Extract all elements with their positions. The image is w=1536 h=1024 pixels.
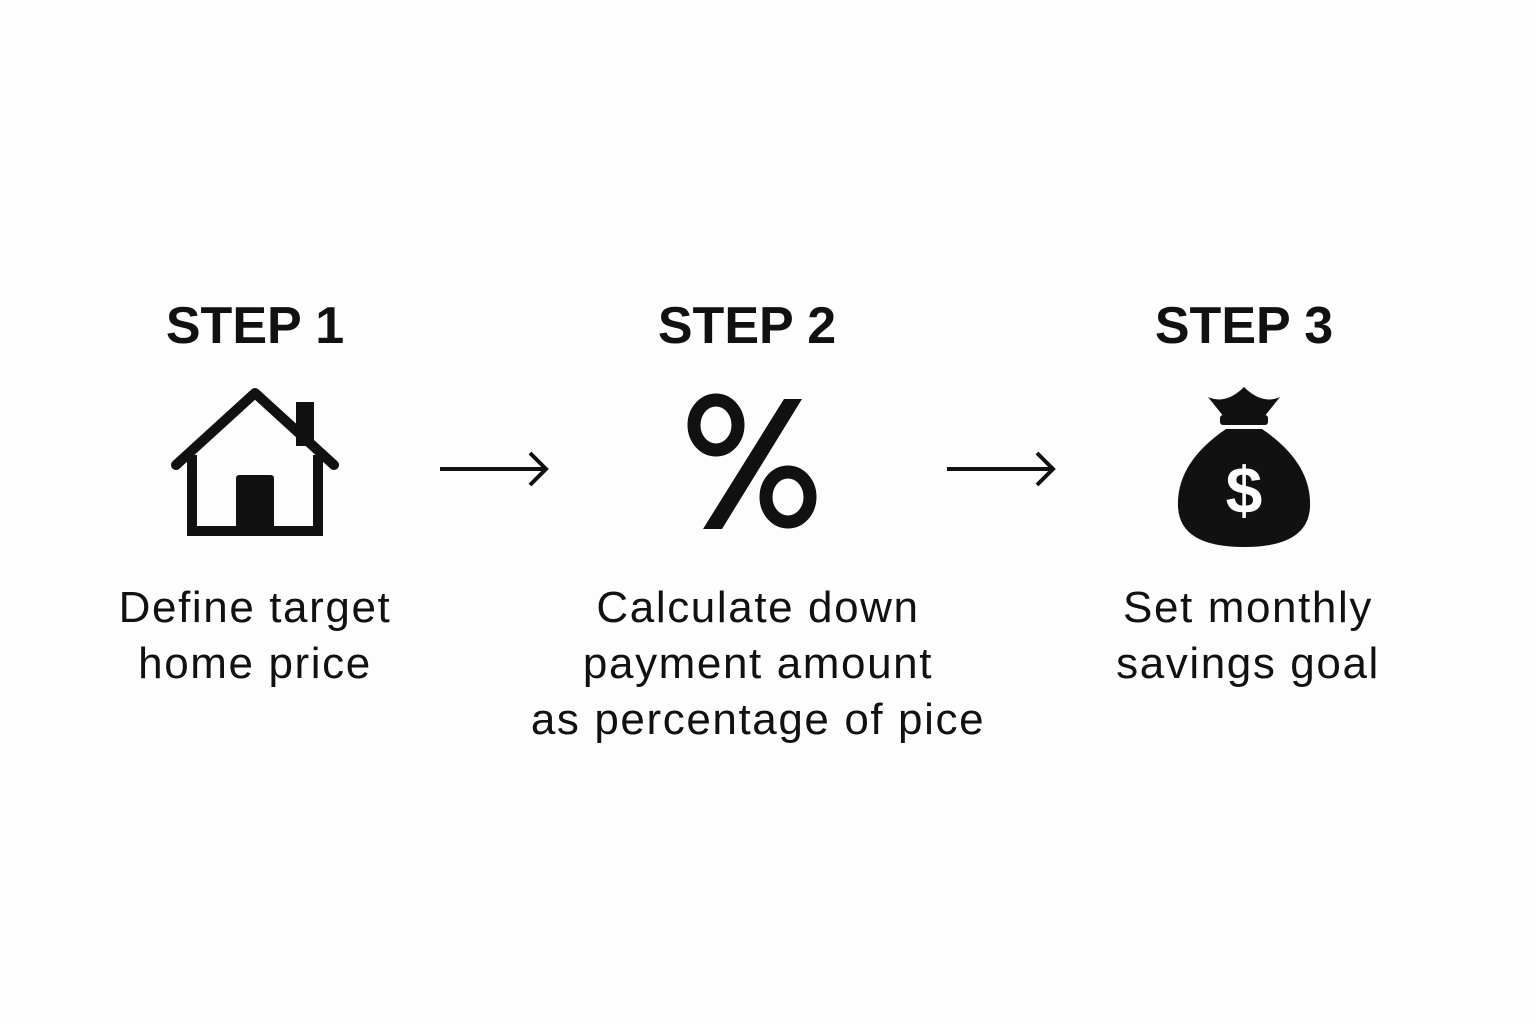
arrow 1: [440, 452, 549, 486]
icon: house: [171, 388, 339, 536]
text: step 3: Set monthly: [1123, 583, 1373, 632]
icon: percent: [688, 394, 816, 529]
icon: money bag: $: [1226, 453, 1262, 527]
text: step 1: home price: [138, 639, 372, 688]
text: step 2: [531, 583, 985, 744]
text: step 2: Calculate down: [596, 583, 920, 632]
text: step 3: [1116, 583, 1380, 688]
heading: step 3: STEP 3: [1155, 297, 1333, 355]
text: step 2: as percentage of pice: [531, 695, 985, 744]
icon: money bag: [1178, 387, 1310, 547]
text: step 1: [119, 583, 391, 688]
heading: step 2: STEP 2: [658, 297, 836, 355]
text: step 3: savings goal: [1116, 639, 1380, 688]
text: step 1: Define target: [119, 583, 391, 632]
text: step 2: payment amount: [583, 639, 933, 688]
heading: step 1: STEP 1: [166, 297, 344, 355]
arrow 2: [947, 452, 1056, 486]
